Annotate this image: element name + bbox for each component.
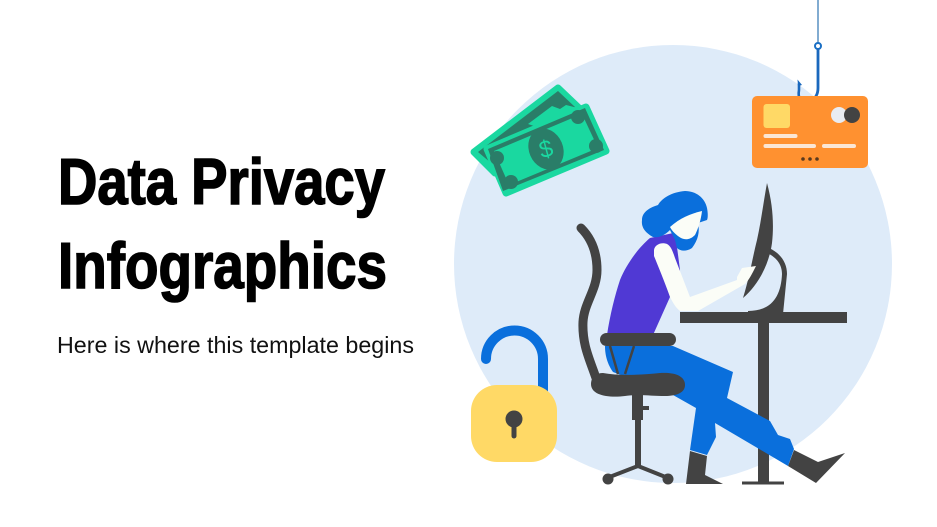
hair [642, 191, 708, 251]
arm [654, 243, 756, 311]
face [670, 211, 702, 239]
pants [605, 346, 794, 466]
shirt [607, 232, 680, 335]
lock body [471, 385, 557, 462]
background circle [454, 45, 892, 483]
icon: fishing hook [798, 0, 821, 99]
desk [680, 312, 847, 484]
title: Infographics [58, 229, 387, 302]
shackle [486, 330, 543, 394]
dollar sign: $ [536, 135, 556, 164]
boots [686, 450, 845, 484]
title [58, 145, 387, 302]
keyhole [506, 410, 522, 436]
icon: credit card [752, 96, 868, 168]
computer monitor [743, 183, 787, 314]
title: Data Privacy [58, 145, 385, 218]
subtitle: Here is where this template begins [57, 332, 414, 358]
office chair seat and base [591, 333, 685, 484]
person [605, 191, 845, 484]
office chair back [581, 228, 597, 378]
icon: money [474, 88, 606, 193]
back banknote [474, 88, 579, 173]
icon: open padlock [471, 330, 557, 462]
